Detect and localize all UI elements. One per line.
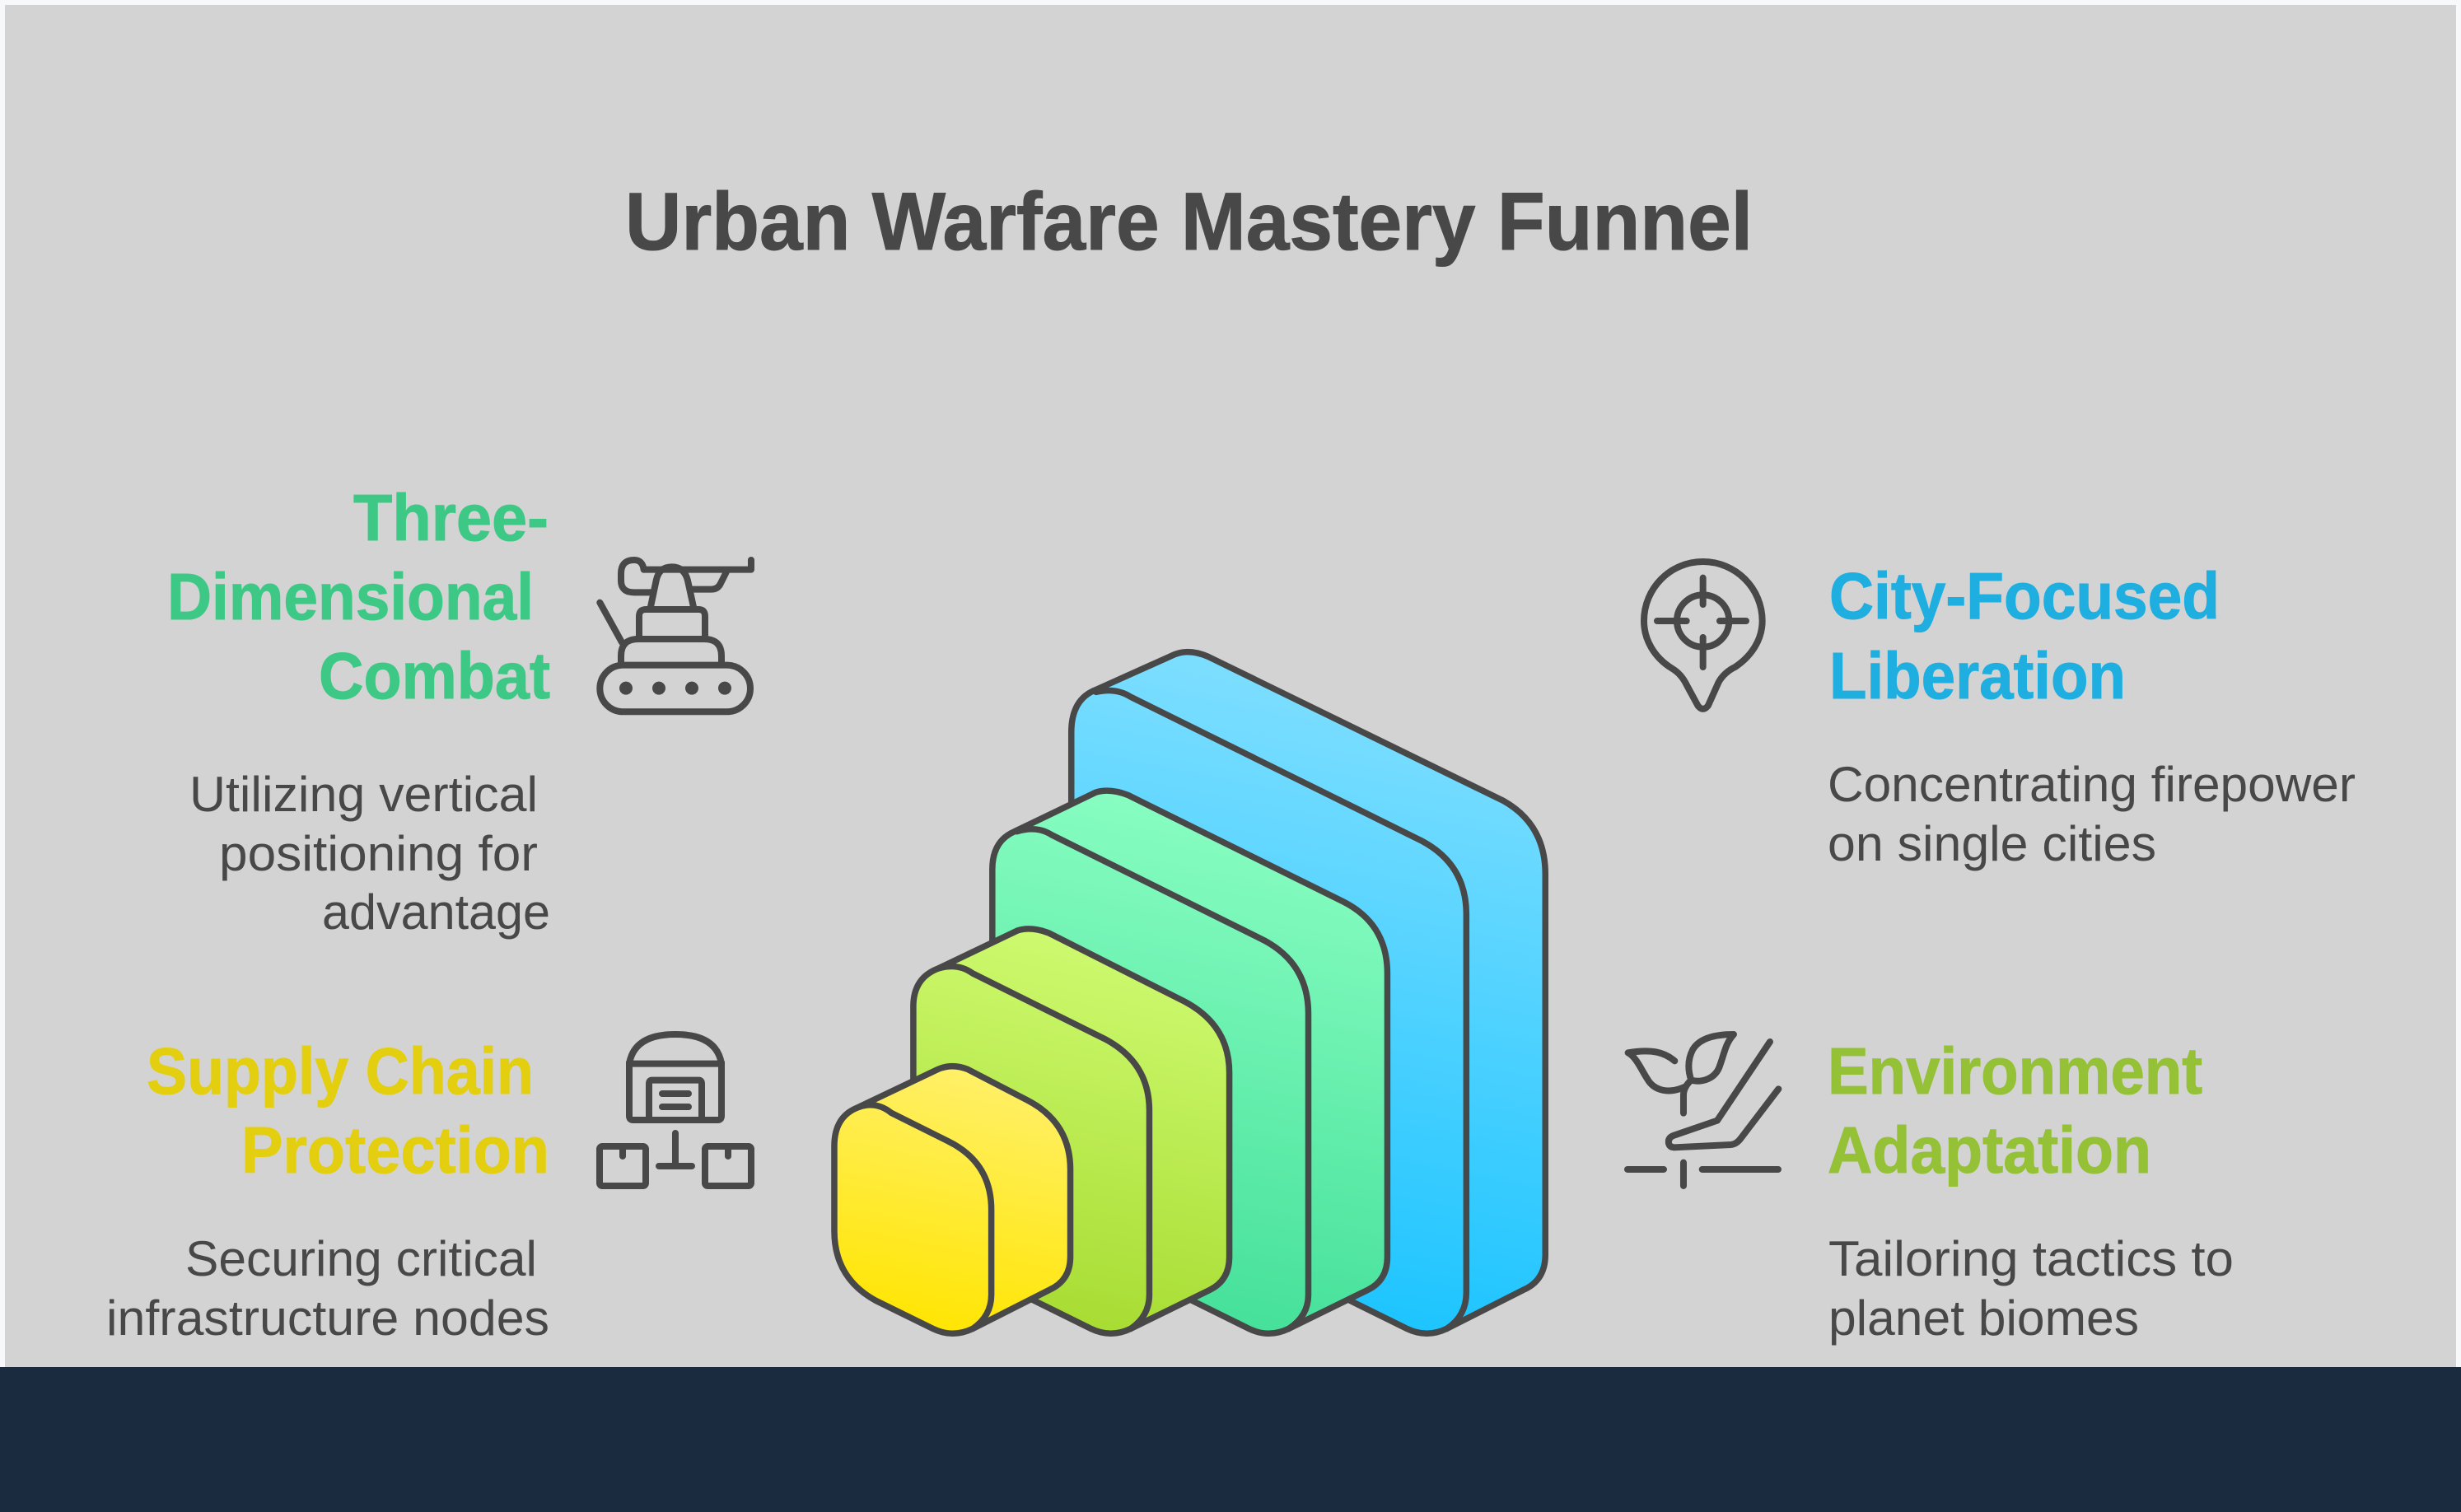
panel: supply chain protection <box>106 1034 751 1346</box>
funnel layer: blue <box>1072 652 1545 1333</box>
icon: warehouse network <box>600 1034 751 1186</box>
description: three-dimensional combat: positioning for <box>219 826 538 881</box>
title: Urban Warfare Mastery Funnel <box>625 175 1753 267</box>
icon: plant in hand <box>1627 1034 1778 1186</box>
heading: three-dimensional combat: Combat <box>319 639 550 712</box>
description: environment adaptation: Tailoring tactics to <box>1828 1231 2234 1286</box>
funnel layer: lime <box>913 929 1230 1333</box>
heading: city-focused liberation <box>1829 559 2220 712</box>
description: city-focused liberation: on single cities <box>1828 816 2156 871</box>
panel: city-focused liberation <box>1644 559 2356 871</box>
panel: environment adaptation <box>1627 1034 2234 1346</box>
description: environment adaptation <box>1828 1231 2234 1346</box>
description: three-dimensional combat: advantage <box>322 884 550 940</box>
heading: supply chain protection: Protection <box>241 1113 549 1187</box>
icon: map pin target <box>1644 562 1763 709</box>
panel: three-dimensional combat <box>167 481 751 940</box>
description: three-dimensional combat: Utilizing vertical <box>189 767 538 822</box>
description: environment adaptation: planet biomes <box>1828 1290 2139 1346</box>
heading: city-focused liberation: Liberation <box>1829 639 2126 712</box>
heading: three-dimensional combat <box>167 481 550 712</box>
description: supply chain protection <box>106 1231 549 1346</box>
description: supply chain protection: Securing critical <box>185 1231 537 1286</box>
heading: three-dimensional combat: Three- <box>353 481 549 554</box>
heading: three-dimensional combat: Dimensional <box>167 560 534 633</box>
description: city-focused liberation: Concentrating firepower <box>1828 757 2356 812</box>
icon: tank <box>600 560 751 712</box>
heading: environment adaptation: Adaptation <box>1828 1113 2151 1187</box>
description: city-focused liberation <box>1828 757 2356 871</box>
description: three-dimensional combat <box>189 767 550 940</box>
heading: supply chain protection: Supply Chain <box>147 1034 534 1108</box>
heading: environment adaptation <box>1828 1034 2202 1187</box>
funnel chart <box>834 652 1545 1333</box>
footer band <box>0 1367 2461 1512</box>
heading: environment adaptation: Environment <box>1828 1034 2202 1108</box>
heading: city-focused liberation: City-Focused <box>1829 559 2220 632</box>
funnel layer: green <box>992 791 1387 1333</box>
description: supply chain protection: infrastructure nodes <box>106 1290 549 1346</box>
heading: supply chain protection <box>147 1034 549 1187</box>
funnel layer: yellow <box>834 1066 1071 1333</box>
